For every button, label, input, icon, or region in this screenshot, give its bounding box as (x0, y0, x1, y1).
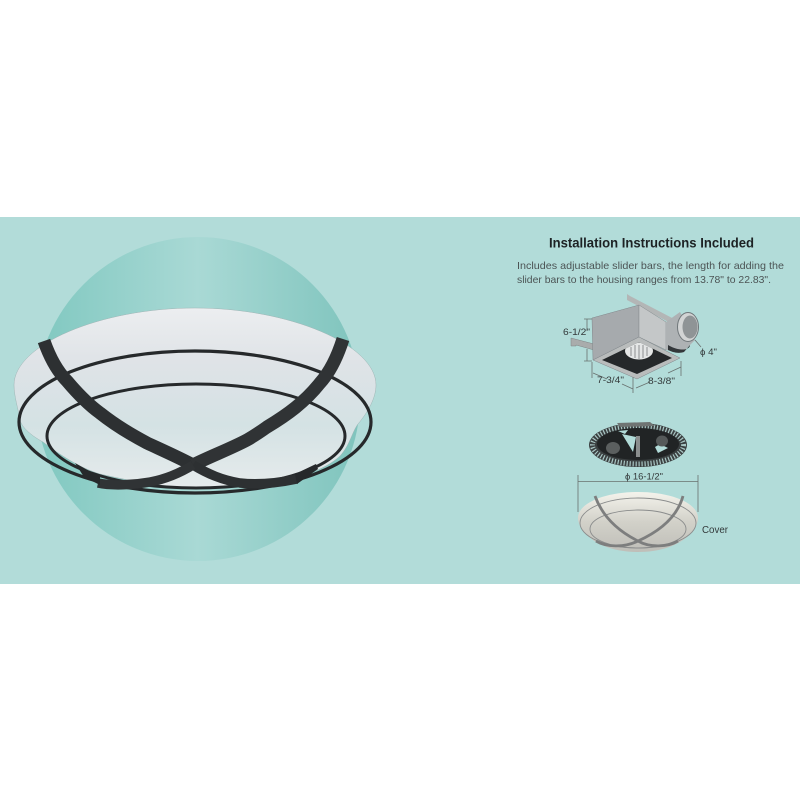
strap: from top left, upper arm (44, 341, 193, 465)
duct collar (678, 312, 698, 342)
dark plate (597, 428, 679, 460)
dark opening (602, 342, 672, 374)
light fixture (14, 308, 376, 493)
strap: from top right, upper arm (193, 339, 343, 465)
white dish (14, 308, 376, 488)
outer ring (19, 351, 371, 493)
teal background band (0, 217, 800, 584)
duct body (666, 312, 695, 351)
heading: Installation Instructions Included (549, 236, 754, 250)
duct opening (682, 316, 698, 338)
strap: lower right arm (193, 465, 297, 484)
dimension labels: 6-1/2" (563, 327, 590, 338)
housing flange (593, 337, 680, 379)
dimension labels (563, 327, 717, 387)
duct shadow (668, 345, 690, 353)
cover straps (595, 496, 683, 546)
panel: product photo (14, 237, 376, 561)
teal circle behind the light (36, 237, 360, 561)
ring base (589, 423, 687, 467)
top rail (627, 294, 676, 326)
cover label: Cover (702, 524, 728, 536)
diagram: mounting plate (589, 422, 687, 467)
side bracket (571, 338, 594, 350)
description text: slider bars to the housing ranges from 13.78" to 22.83". (517, 274, 771, 286)
cover dish (578, 492, 698, 552)
plate motors (606, 442, 620, 454)
description text (517, 260, 784, 286)
plate bracket (636, 436, 640, 457)
diagram: cover (578, 472, 728, 552)
dimension labels: 8-3/8" (648, 376, 675, 387)
cover width dimension (578, 475, 698, 512)
inner ring (47, 384, 345, 488)
blower wheel (625, 342, 653, 360)
slotted ring (592, 426, 684, 464)
cover rings (580, 498, 696, 548)
description text: Includes adjustable slider bars, the length for adding the (517, 260, 784, 272)
diagram: fan housing (563, 294, 717, 393)
housing right face (639, 305, 666, 350)
plate cut-outs (618, 430, 668, 453)
dimension labels: ϕ 4" (700, 347, 717, 358)
cover width label: ϕ 16-1/2" (625, 472, 663, 482)
dimension lines (584, 319, 701, 393)
infographic canvas (0, 217, 800, 584)
housing left face (592, 305, 639, 360)
dimension labels: 7-3/4" (597, 375, 624, 386)
strap: lower left arm (98, 465, 193, 485)
strap end clips (75, 463, 100, 485)
